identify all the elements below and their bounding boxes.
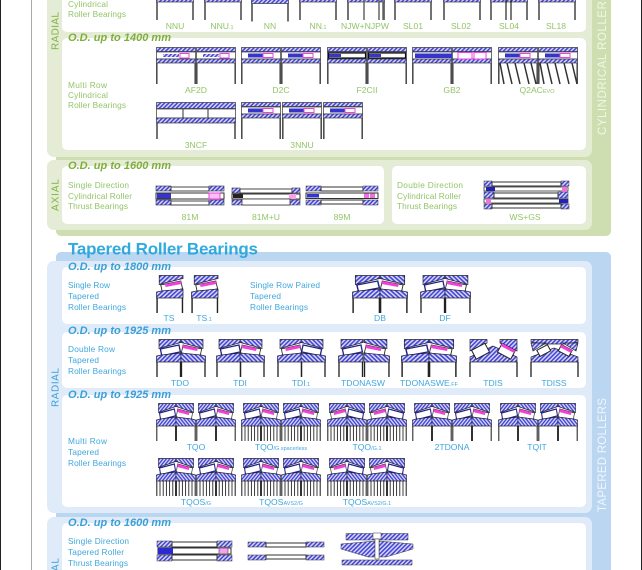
- text: single direction tapered thrust: [68, 536, 129, 568]
- labels: multi row cylindrical: GB2: [443, 85, 461, 95]
- text: multi row tapered: [68, 436, 126, 468]
- text: multi row cylindrical: Cylindrical: [68, 90, 108, 100]
- labels: multi row cylindrical: F2CII: [356, 85, 378, 95]
- labels: multi row cylindrical: AF2D: [185, 85, 207, 95]
- text: double direction cylindrical thrust: Thrust Bearings: [397, 201, 457, 211]
- labels: double row tapered: TDONASW: [341, 378, 386, 388]
- bearing: 3NNU: [242, 102, 362, 139]
- text: single row paired tapered: Roller Bearings: [250, 302, 308, 312]
- bearing: TQOS AVS2/G.1: [327, 458, 407, 496]
- bearing: 81M: [156, 186, 224, 205]
- labels: double row tapered: TDI: [233, 378, 247, 388]
- heading: 1600 mm axial tapered: O.D. up to 1600 mm: [68, 517, 171, 529]
- labels: top cylindrical row: NNU: [166, 21, 184, 31]
- side label: radial: RADIAL: [50, 12, 62, 50]
- labels: top cylindrical row: SL04: [499, 21, 519, 31]
- text: single direction tapered thrust: Tapered Roller: [68, 547, 124, 557]
- bearing: DB: [353, 276, 407, 313]
- text: double direction cylindrical thrust: Double Direction: [397, 180, 463, 190]
- labels: double row tapered: [171, 378, 567, 388]
- panel: tapered axial group: [47, 517, 592, 570]
- bearing: TS.1: [192, 276, 218, 313]
- labels: axial cylindrical: 89M: [334, 212, 350, 222]
- bearing: GB2: [412, 48, 492, 84]
- bearing: TQIT: [498, 404, 578, 441]
- side label: axial: AXIAL: [50, 179, 62, 211]
- labels: single row tapered: DB: [374, 313, 386, 323]
- bearing: TDONASWE.FF: [402, 340, 456, 377]
- panel: radial group: [47, 0, 592, 157]
- labels: single row tapered: TS: [164, 313, 175, 323]
- heading: 1925 mm double row: O.D. up to 1925 mm: [68, 325, 171, 337]
- text: single row tapered: Roller Bearings: [68, 302, 126, 312]
- text: single direction cylindrical thrust: [68, 180, 132, 211]
- labels: double row tapered: TDISS: [541, 378, 567, 388]
- text: double row tapered: Roller Bearings: [68, 366, 126, 376]
- panel: cylindrical rollers: [47, 0, 611, 236]
- labels: double row tapered: TDI.1: [292, 378, 310, 388]
- bearing: 89M: [306, 186, 378, 205]
- labels: single row tapered: DF: [439, 313, 451, 323]
- labels: axial cylindrical: WS+GS: [509, 212, 541, 222]
- text: single direction tapered thrust: Thrust Bearings: [68, 558, 128, 568]
- text: double row tapered: Tapered: [68, 355, 99, 365]
- bearing: TS: [157, 276, 183, 313]
- labels: multi row cylindrical: D2C: [272, 85, 290, 95]
- labels: top cylindrical row: SL18: [546, 21, 566, 31]
- text: multi row tapered: Multi Row: [68, 436, 108, 446]
- text: single direction tapered thrust: Single Direction: [68, 536, 129, 546]
- labels: top cylindrical row: NN.1: [309, 21, 327, 31]
- labels: multi row tapered: 2TDONA: [435, 442, 470, 452]
- labels: multi row tapered: TQO: [187, 442, 206, 452]
- text: cylindrical roller bearings: Roller Bearings: [68, 9, 126, 19]
- text: single row tapered: [68, 280, 126, 312]
- labels: double row tapered: TDONASWE.FF: [400, 378, 459, 388]
- labels: double row tapered: TDIS: [483, 378, 503, 388]
- text: single row paired tapered: Tapered: [250, 291, 281, 301]
- labels: top cylindrical row: NNU.1: [210, 21, 234, 31]
- bearing: TQOS AVS2/G: [241, 458, 321, 496]
- bearing: DF: [420, 276, 470, 313]
- text: double direction cylindrical thrust: [397, 180, 463, 211]
- bearing: TQO/G spacerless: [241, 404, 321, 441]
- text: cylindrical roller bearings: [68, 0, 126, 19]
- bearing: F2CII: [328, 48, 406, 84]
- bearing: 3NCF: [156, 102, 236, 139]
- bearing: TQOS/G: [156, 458, 236, 496]
- text: multi row cylindrical: Multi Row: [68, 80, 108, 90]
- text: double direction cylindrical thrust: Cylindrical Roller: [397, 191, 461, 201]
- labels: multi row tapered: [181, 442, 548, 507]
- heading: 1800 mm: O.D. up to 1800 mm: [68, 261, 171, 273]
- labels: multi row cylindrical: 3NCF: [185, 140, 207, 150]
- bearing: AF2D: [156, 48, 236, 84]
- labels: multi row tapered: TQIT: [527, 442, 548, 452]
- labels: axial cylindrical: 81M: [182, 212, 198, 222]
- text: multi row cylindrical: [68, 80, 126, 110]
- labels: multi row tapered: TQOSAVS2/G: [259, 497, 303, 507]
- bearing: 2TDONA: [412, 404, 492, 441]
- labels: multi row tapered: TQO/G.1: [352, 442, 382, 452]
- panel: axial group: [47, 160, 592, 230]
- bearing: WS+GS: [484, 181, 569, 209]
- heading: 1600 mm axial cylindrical: O.D. up to 1600 mm: [68, 160, 171, 172]
- text: single direction cylindrical thrust: Single Direction: [68, 180, 129, 190]
- side label: tapered rollers: TAPERED ROLLERS: [597, 398, 609, 512]
- labels: multi row cylindrical: Q2ACEVO: [519, 85, 555, 95]
- bearing: 81M+U: [232, 188, 300, 205]
- bearings drawings: [156, 0, 578, 565]
- text: single row tapered: Single Row: [68, 280, 111, 290]
- text: single row tapered: Tapered: [68, 291, 99, 301]
- labels: axial cylindrical: 81M+U: [252, 212, 280, 222]
- bearings: top cylindrical row: [156, 0, 576, 22]
- labels: top cylindrical row: [166, 21, 566, 31]
- labels: multi row tapered: TQO/G spacerless: [255, 442, 307, 452]
- text: multi row tapered: Roller Bearings: [68, 458, 126, 468]
- labels: top cylindrical row: SL01: [403, 21, 423, 31]
- bearing: TDONASW: [338, 340, 389, 377]
- bearing: tapered thrust 2: [248, 542, 324, 560]
- labels: axial cylindrical: [182, 212, 541, 222]
- panel: tapered rollers: [47, 252, 611, 570]
- heading: 1400 mm: O.D. up to 1400 mm: [68, 32, 171, 44]
- labels: multi row tapered: TQOSAVS2/G.1: [343, 497, 391, 507]
- bearing: Q2AC: [498, 48, 578, 84]
- bearing: TDI: [216, 340, 264, 377]
- text: single row paired tapered: [250, 280, 320, 312]
- text: single direction cylindrical thrust: Thrust Bearings: [68, 201, 128, 211]
- text: double row tapered: [68, 344, 126, 376]
- text: single direction cylindrical thrust: Cylindrical Roller: [68, 191, 132, 201]
- labels: multi row cylindrical: 3NNU: [290, 140, 314, 150]
- bearing: TDI.1: [278, 340, 326, 377]
- text: multi row cylindrical: Roller Bearings: [68, 100, 126, 110]
- labels: single row tapered: [164, 313, 451, 323]
- title: Tapered Roller Bearings: [68, 240, 258, 258]
- heading: 1925 mm multi row: O.D. up to 1925 mm: [68, 389, 171, 401]
- bearing: tapered thrust 3: [341, 533, 413, 565]
- bearing: TDO: [156, 340, 206, 377]
- text: double row tapered: Double Row: [68, 344, 116, 354]
- labels: double row tapered: TDO: [171, 378, 189, 388]
- labels: top cylindrical row: SL02: [451, 21, 471, 31]
- labels: multi row cylindrical: [185, 85, 555, 150]
- panel: tapered radial group: [47, 261, 592, 513]
- labels: single row tapered: TS.1: [196, 313, 212, 323]
- text: multi row tapered: Tapered: [68, 447, 99, 457]
- labels: top cylindrical row: NN: [264, 21, 276, 31]
- side label: tapered radial: RADIAL: [50, 368, 62, 407]
- bearing: TDIS: [470, 340, 517, 377]
- bearing: TQO: [156, 404, 236, 441]
- labels: top cylindrical row: NJW+NJPW: [341, 21, 390, 31]
- labels: multi row tapered: TQOS/G: [181, 497, 211, 507]
- bearing: TDISS: [531, 340, 578, 377]
- bearing: tapered thrust 1: [157, 541, 232, 561]
- bearing: D2C: [242, 48, 320, 84]
- bearing: TQO/G.1: [327, 404, 407, 441]
- text: single row paired tapered: Single Row Paired: [250, 280, 320, 290]
